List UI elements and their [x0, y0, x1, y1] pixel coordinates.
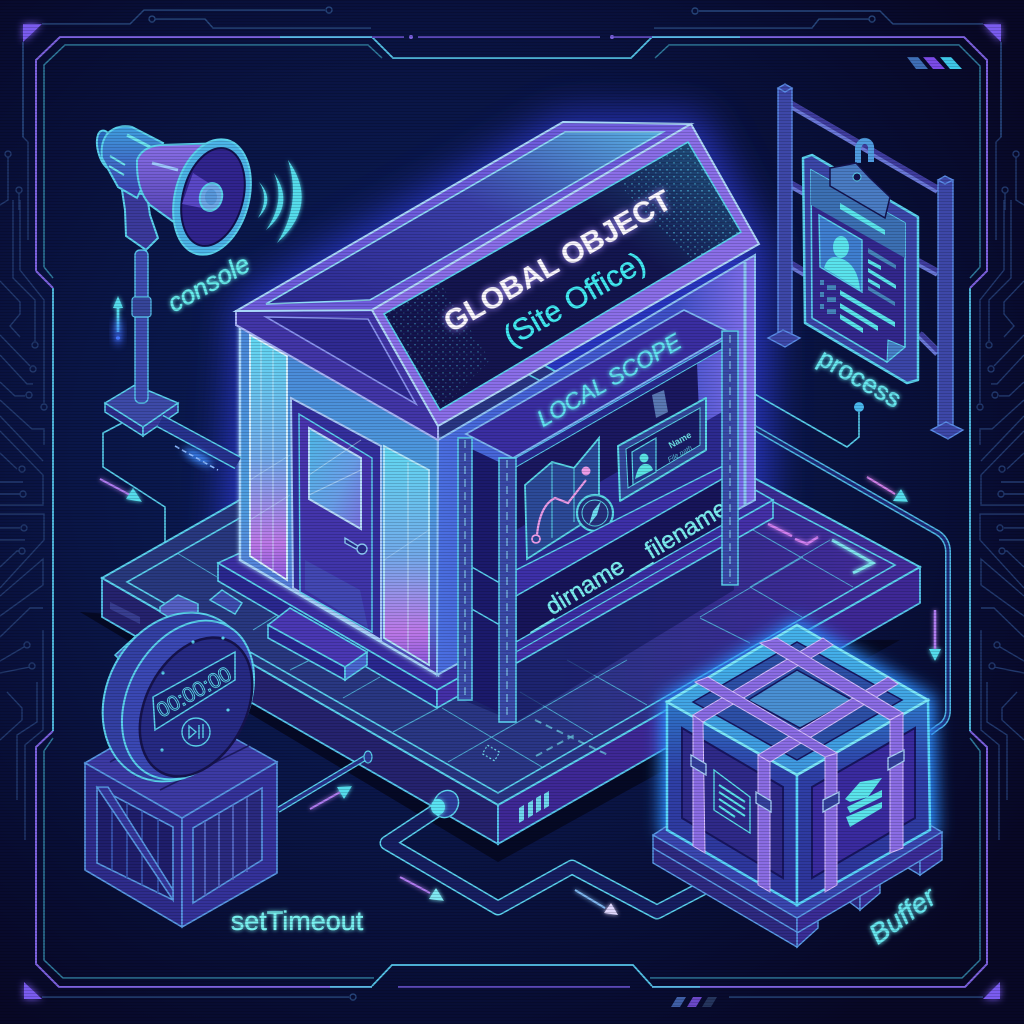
pipe: platform to right side	[753, 427, 948, 733]
connector pipe	[160, 421, 238, 463]
roof top plane	[236, 122, 691, 311]
console: megaphone stand	[93, 126, 302, 502]
trace: console base to platform	[103, 423, 165, 543]
flow arrow right one	[867, 477, 908, 502]
clipboard paper	[811, 170, 905, 362]
stopwatch body	[74, 586, 280, 808]
house: site office	[218, 122, 773, 722]
pipe connector	[429, 786, 463, 822]
filename label: __filename	[617, 495, 732, 579]
settimeout label: setTimeout	[231, 906, 364, 936]
shelf floor shadow	[463, 530, 734, 722]
crate	[85, 708, 277, 927]
arrow down-right	[100, 479, 142, 502]
flow arrow one	[400, 877, 444, 901]
play pause	[182, 718, 210, 746]
arrow up	[113, 296, 123, 340]
status ticks top right	[907, 57, 962, 69]
crate top	[85, 708, 277, 818]
side circuit traces left	[0, 42, 47, 840]
platform vents	[519, 791, 549, 823]
local scope label: LOCAL SCOPE	[532, 328, 686, 432]
house plinth	[218, 487, 773, 708]
platform top surface	[102, 347, 920, 805]
trace: process to platform	[753, 393, 864, 447]
shelf posts	[458, 331, 738, 722]
wall glow strip left	[250, 335, 287, 580]
arrow: settimeout	[278, 751, 372, 810]
local scope shelf	[458, 310, 738, 722]
shelf back panel	[516, 363, 700, 596]
house backlight glow	[220, 115, 770, 700]
id badge: Name	[667, 430, 693, 450]
megaphone	[93, 126, 263, 264]
platform right face	[498, 567, 920, 844]
shelf top board	[466, 310, 731, 458]
shelf left bay	[463, 445, 516, 720]
stopwatch display	[153, 652, 235, 730]
hanger hook	[858, 141, 871, 163]
door window	[309, 428, 361, 529]
platform	[80, 347, 920, 862]
compass	[577, 495, 613, 531]
process: rack and clipboard	[768, 84, 963, 439]
flow arrow right two	[929, 610, 941, 661]
stopwatch: 00:00:00	[153, 663, 236, 722]
pipe: platform to buffer	[387, 786, 703, 912]
filename band	[516, 474, 732, 642]
roof sign panel	[372, 124, 759, 426]
house right wall	[437, 255, 755, 675]
crate left side	[667, 702, 797, 905]
map	[525, 438, 613, 559]
photo	[819, 215, 862, 292]
wall glow strip right	[384, 446, 429, 665]
crate top side	[667, 625, 928, 775]
house door	[291, 398, 381, 640]
status ticks bottom	[671, 997, 717, 1007]
house left wall	[240, 325, 438, 675]
crate left face	[85, 763, 182, 927]
side circuit traces right	[977, 42, 1024, 840]
crate right face	[182, 762, 277, 927]
clipboard board	[803, 155, 918, 383]
sign title: GLOBAL OBJECT	[438, 184, 677, 339]
rack rails	[788, 101, 938, 353]
layers icon	[845, 778, 882, 827]
crate right side	[797, 700, 930, 905]
id badge	[618, 390, 706, 501]
roof	[236, 122, 759, 440]
rack posts	[768, 84, 963, 439]
clipboard text lines	[820, 203, 896, 333]
id badge: File path	[667, 445, 694, 464]
buffer crate	[653, 618, 943, 950]
pallet	[653, 825, 942, 947]
clipboard clip	[830, 163, 890, 218]
shelf lower board	[516, 462, 731, 596]
dirname label: __dirname	[517, 553, 629, 635]
spark	[114, 318, 218, 470]
sign subtitle: (Site Office)	[498, 246, 651, 353]
stand base	[105, 385, 178, 436]
flow arrow two	[575, 890, 618, 915]
stopwatch	[74, 586, 280, 808]
roof hip	[236, 310, 438, 440]
stopwatch buttons	[115, 590, 242, 672]
sound waves	[258, 160, 302, 243]
console label: console	[162, 248, 255, 318]
process label: process	[813, 342, 907, 414]
arrow settimeout flow	[310, 786, 352, 809]
stand pole	[135, 250, 148, 403]
straps	[693, 638, 903, 892]
doc icon	[714, 770, 750, 833]
buffer label: Buffer	[863, 880, 943, 950]
door handle	[345, 538, 367, 554]
step at door	[268, 608, 367, 680]
platform left face	[102, 578, 498, 844]
